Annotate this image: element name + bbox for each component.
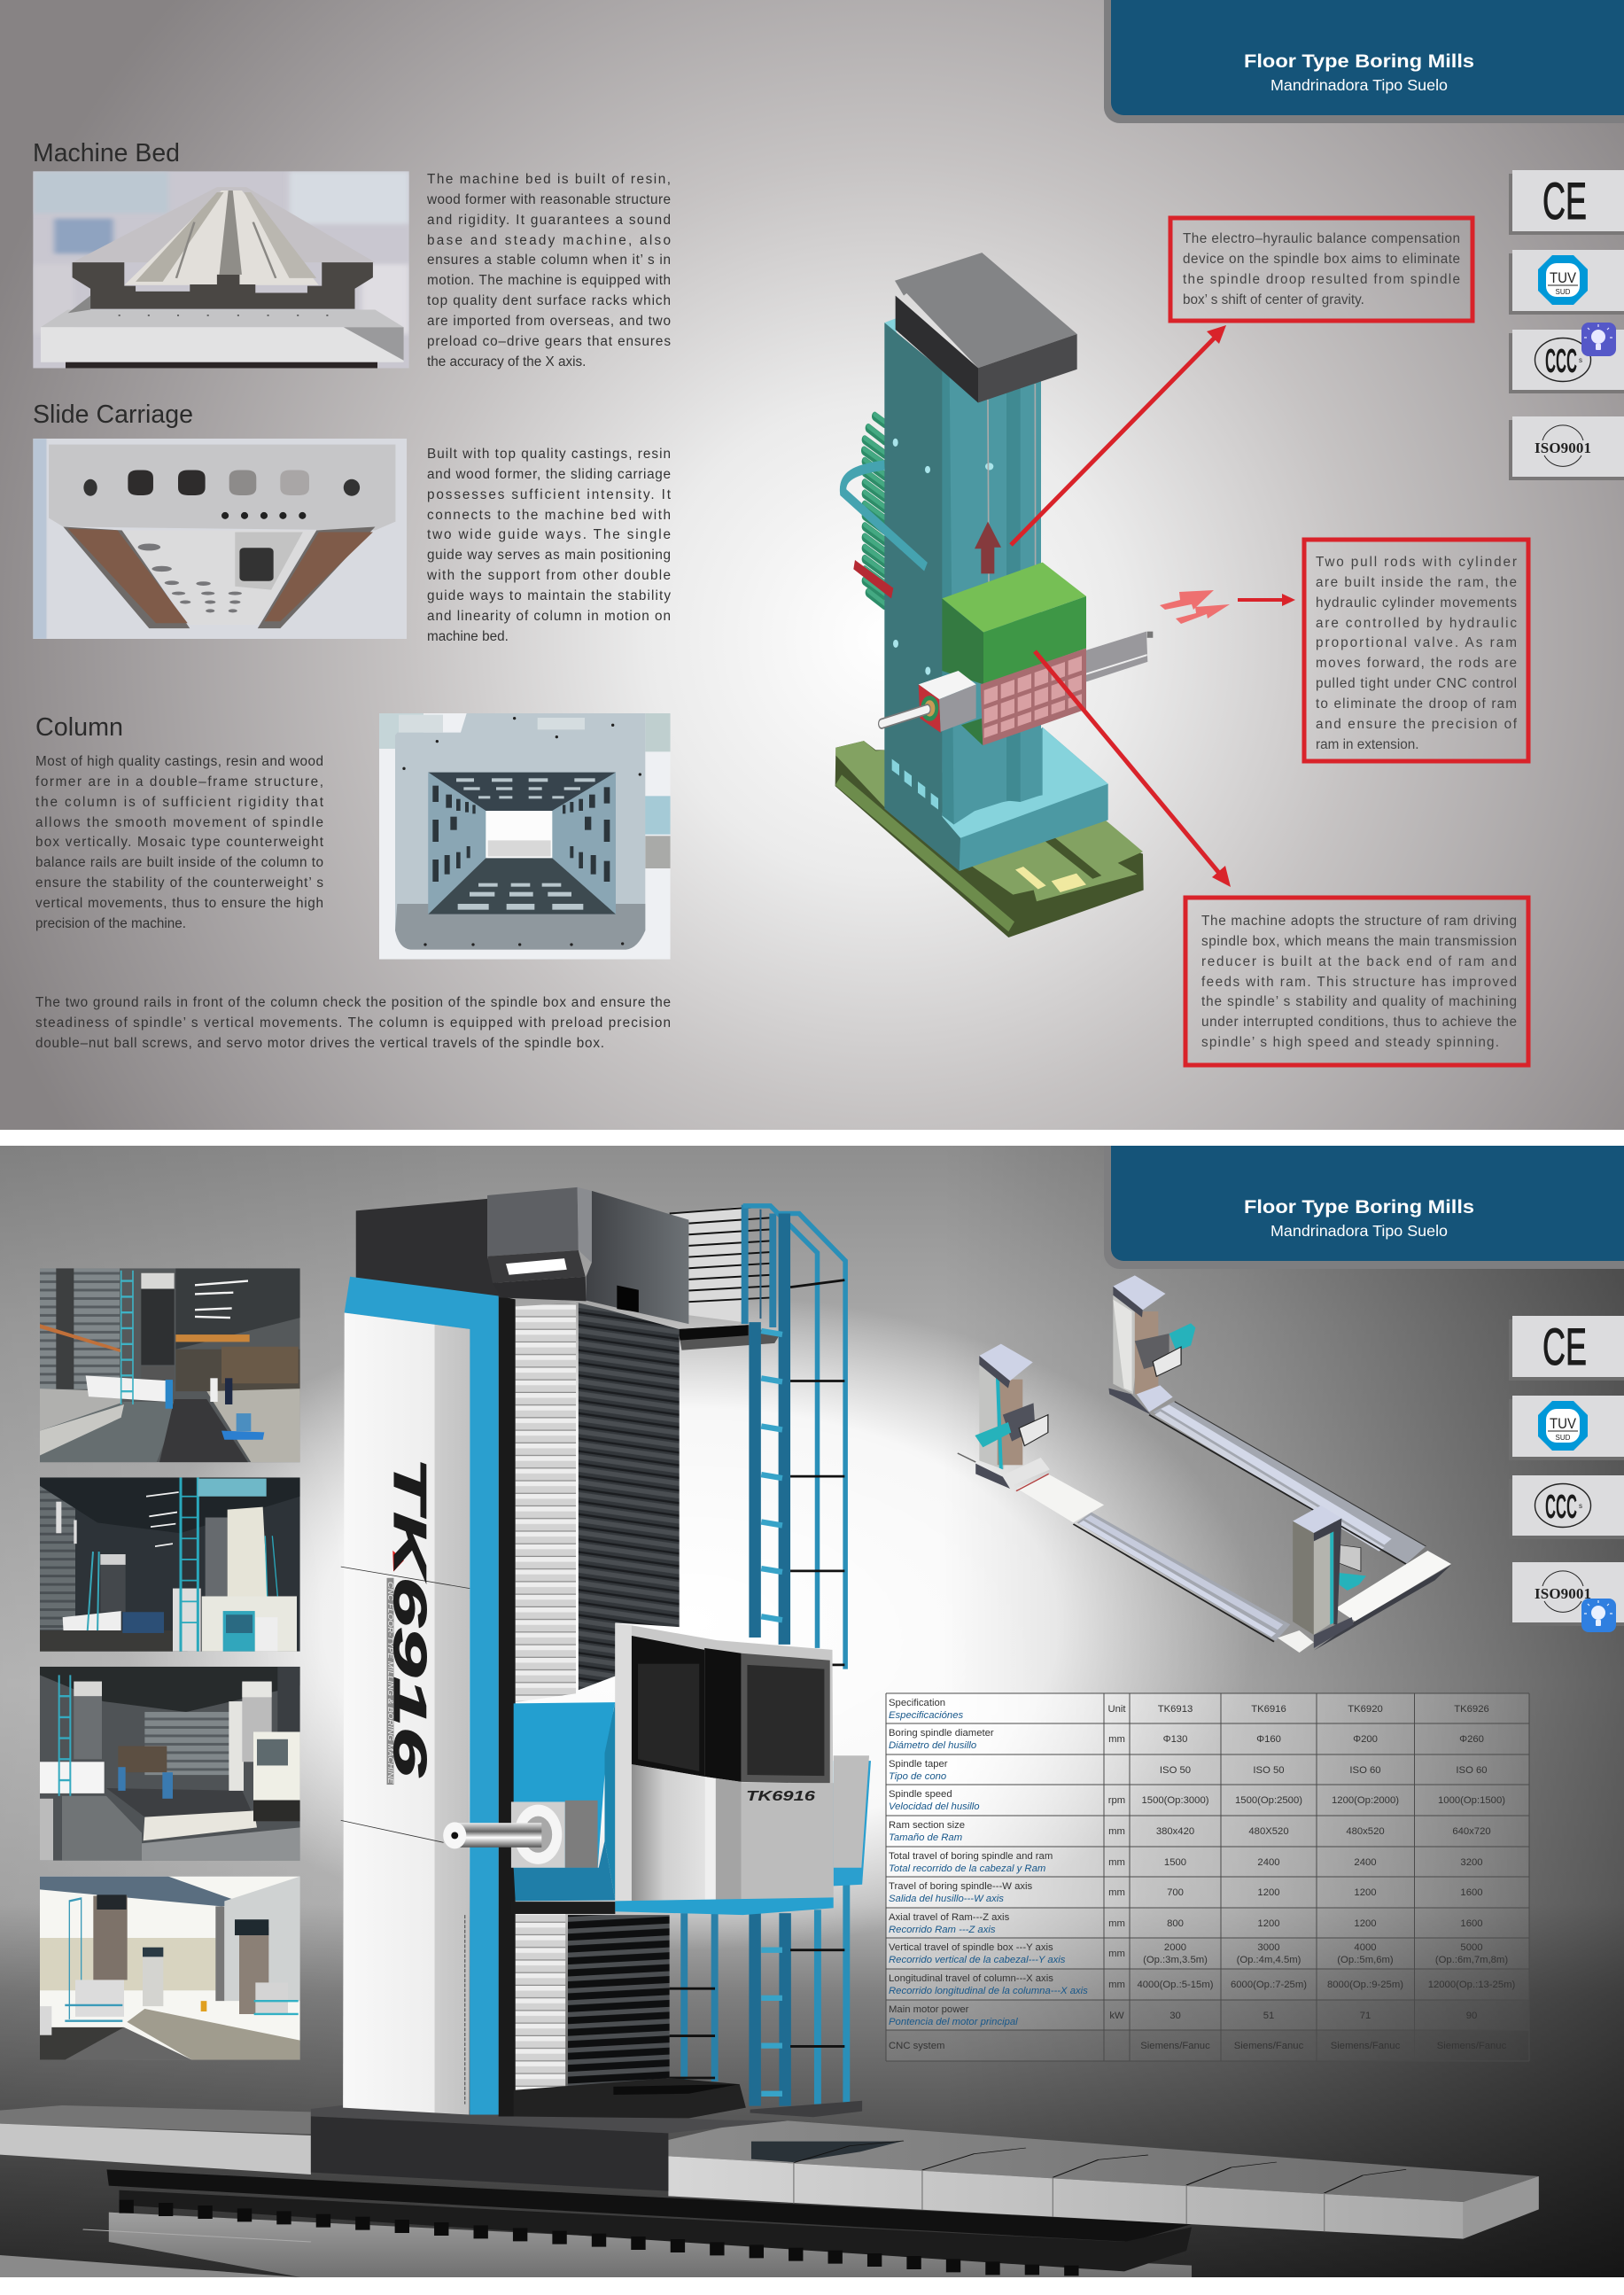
- text block: column description: precision of the machine.: [35, 916, 186, 931]
- icon: pink double arrows: [1160, 590, 1230, 624]
- row: spindle speed: 1200(Op:2000): [1332, 1795, 1399, 1806]
- arrow: red leader to transmission callout: [1035, 651, 1231, 887]
- row: W axis: Salida del husillo---W axis: [889, 1894, 1004, 1904]
- text block: slide carriage description: possesses sufficient intensity. It: [427, 487, 672, 502]
- badge: TUV top: [1509, 250, 1624, 315]
- badge: CE top: [1509, 170, 1624, 235]
- text block: machine bed description: the accuracy of the X axis.: [427, 354, 586, 370]
- reflection: [0, 2213, 1192, 2277]
- diagram: column cutaway model: [835, 253, 1153, 937]
- row: W axis: mm: [1108, 1887, 1125, 1898]
- row: motor power: 30: [1169, 2011, 1181, 2021]
- text block: slide carriage description: and wood former, the sliding carriage: [427, 467, 671, 482]
- row: Y axis: 5000: [1460, 1942, 1483, 1953]
- badge: CCC top: [1509, 330, 1624, 393]
- row: spindle taper: ISO 50: [1253, 1765, 1285, 1776]
- callout: pull rods: hydraulic cylinder movements: [1316, 595, 1517, 611]
- row: W axis: 700: [1167, 1887, 1184, 1898]
- column left: [958, 1344, 1048, 1489]
- white bellows: [516, 1303, 576, 2090]
- row: X axis: Recorrido longitudinal de la columna---X axis: [889, 1986, 1088, 1996]
- row: X axis: Longitudinal travel of column---X axis: [889, 1973, 1053, 1984]
- row: Z axis: Axial travel of Ram---Z axis: [889, 1912, 1010, 1923]
- badge: ISO9001 bottom: ISO9001: [1535, 1585, 1591, 1602]
- row: Y axis: Vertical travel of spindle box ---Y axis: [889, 1942, 1053, 1953]
- badge: CCC top: CCC: [1545, 343, 1577, 380]
- badge: TUV bottom: SUD: [1556, 1434, 1571, 1442]
- row: Y axis: 4000: [1354, 1942, 1377, 1953]
- row: Z axis: 800: [1167, 1918, 1184, 1929]
- row: header: Unit: [1107, 1704, 1126, 1715]
- row: X axis: 6000(Op.:7-25m): [1231, 1980, 1307, 1990]
- text block: machine bed description: and rigidity. It guarantees a sound: [427, 213, 671, 228]
- callout: ram driving structure: the spindle’ s stability and quality of machining: [1201, 994, 1517, 1009]
- row: ram section size: [886, 1816, 1529, 1847]
- row: W axis: 1200: [1354, 1887, 1377, 1898]
- row: spindle speed: 1500(Op:3000): [1141, 1795, 1209, 1806]
- row: CNC system: CNC system: [889, 2041, 944, 2051]
- machine base and way covers: [0, 2105, 1539, 2277]
- row: header: TK6926: [1454, 1704, 1489, 1715]
- spindle housing: [443, 1702, 615, 1901]
- table: specifications: [886, 1693, 1529, 2061]
- row: ram section size: Ram section size: [889, 1820, 965, 1831]
- callout: ram driving structure: spindle’ s high speed and steady spinning.: [1201, 1035, 1499, 1050]
- column body: [884, 318, 1041, 871]
- left way cover: [0, 2105, 311, 2174]
- photo: workshop 3: [40, 1667, 300, 1861]
- callout: balance compensation: box’ s shift of center of gravity.: [1183, 292, 1364, 307]
- text block: machine bed description: [426, 172, 671, 370]
- panel: top page background: [0, 0, 1624, 1130]
- row: Y axis: (Op.:3m,3.5m): [1143, 1955, 1208, 1965]
- header tab: top page: Floor Type Boring Mills: [1244, 51, 1474, 72]
- callout: ram driving structure: The machine adopts the structure of ram driving: [1201, 914, 1517, 929]
- text block: machine bed description: ensures a stable column when it’ s in: [427, 253, 671, 268]
- badge: ISO9001 top: ISO9001: [1535, 440, 1591, 456]
- row: ram section size: mm: [1108, 1826, 1125, 1837]
- row: total travel: Total travel of boring spindle and ram: [889, 1851, 1053, 1862]
- row: Y axis: (Op.:5m,6m): [1337, 1955, 1394, 1965]
- row: X axis: mm: [1108, 1980, 1125, 1990]
- row: boring spindle diameter: Φ160: [1256, 1734, 1281, 1745]
- header tab: bottom page: Floor Type Boring Mills: [1244, 1196, 1474, 1218]
- ladder and handrail: [670, 1205, 846, 2106]
- heading: Slide Carriage: Slide Carriage: [33, 401, 193, 429]
- text block: column description: box vertically. Mosaic type counterweight: [35, 835, 324, 850]
- row: motor power: Main motor power: [889, 2004, 969, 2015]
- callout: ram driving structure: reducer is built at the back end of ram and: [1201, 954, 1517, 969]
- row: boring spindle diameter: Φ260: [1459, 1734, 1484, 1745]
- badge: CCC bottom: s: [1579, 1502, 1582, 1510]
- row: spindle taper: [886, 1754, 1529, 1785]
- logo text: TK6916 on enclosure: TK6916: [746, 1789, 815, 1804]
- callout: pull rods: pulled tight under CNC control: [1316, 676, 1517, 691]
- text block: machine bed description: motion. The machine is equipped with: [427, 273, 671, 288]
- text block: column description: vertical movements, thus to ensure the high: [35, 896, 323, 911]
- row: Y axis: [886, 1938, 1529, 1969]
- row: boring spindle diameter: Φ130: [1163, 1734, 1187, 1745]
- row: motor power: kW: [1109, 2011, 1124, 2021]
- callout: pull rods: to eliminate the droop of ram: [1316, 696, 1517, 712]
- photo: workshop 4: [40, 1877, 300, 2060]
- row: X axis: 4000(Op.:5-15m): [1137, 1980, 1214, 1990]
- row: spindle speed: [886, 1785, 1529, 1816]
- row: header: Especificaciónes: [889, 1710, 963, 1721]
- row: X axis: [886, 1969, 1529, 2000]
- text block: column description: [35, 754, 324, 931]
- row: Z axis: Recorrido Ram ---Z axis: [889, 1925, 996, 1935]
- rails: [1073, 1402, 1426, 1642]
- callout: pull rods: and ensure the precision of: [1316, 717, 1518, 732]
- callout: balance compensation: device on the spindle box aims to eliminate: [1183, 252, 1460, 267]
- row: spindle taper: ISO 60: [1349, 1765, 1381, 1776]
- badge: ISO9001 top: [1509, 416, 1624, 480]
- top cap: [895, 253, 1077, 402]
- header tab: top page: Mandrinadora Tipo Suelo: [1270, 76, 1448, 94]
- illustration: TK6916 boring mill: [341, 1187, 871, 2118]
- text block: column description: ensure the stability of the counterweight’ s: [35, 875, 323, 891]
- callout: ram driving structure: under interrupted conditions, thus to achieve the: [1201, 1015, 1517, 1030]
- row: W axis: Travel of boring spindle---W axis: [889, 1881, 1033, 1892]
- callout: pull rods: Two pull rods with cylinder: [1316, 555, 1517, 570]
- badge: TUV top: SUD: [1556, 288, 1571, 296]
- callout: pull rods: moves forward, the rods are: [1316, 656, 1517, 671]
- row: motor power: 71: [1360, 2011, 1371, 2021]
- photo: workshop 2: [40, 1477, 300, 1652]
- badge: CE top: CE: [1542, 173, 1587, 230]
- ram tail: [1085, 632, 1153, 682]
- column back: [1108, 1275, 1195, 1415]
- row: total travel: 2400: [1354, 1857, 1377, 1868]
- operator enclosure: [615, 1623, 834, 1915]
- text block: guide rails note: The two ground rails in front of the column check the position of the spindle box and ensure the: [35, 995, 671, 1010]
- row: boring spindle diameter: [886, 1723, 1529, 1754]
- pink ribbed ram: [981, 649, 1086, 745]
- text block: slide carriage description: machine bed.: [427, 629, 509, 644]
- row: ram section size: Tamaño de Ram: [889, 1832, 962, 1843]
- row: ram section size: 480x520: [1346, 1826, 1385, 1837]
- row: Y axis: 2000: [1164, 1942, 1186, 1953]
- row: motor power: [886, 2000, 1529, 2030]
- row: spindle taper: ISO 60: [1456, 1765, 1488, 1776]
- heading: Column: Column: [35, 713, 123, 742]
- callout: pull rods: [1304, 540, 1528, 761]
- row: Y axis: mm: [1108, 1949, 1125, 1959]
- row: Z axis: mm: [1108, 1918, 1125, 1929]
- white column panel: [341, 1312, 470, 2115]
- text block: column description: the column is of sufficient rigidity that: [35, 795, 324, 810]
- row: spindle speed: Velocidad del husillo: [889, 1801, 980, 1812]
- photo: slide carriage: [33, 439, 407, 639]
- logo subtext on column: CNC FLOOR-TYPE MILLING & BORING MACHINE: [386, 1582, 394, 1785]
- row: total travel: Total recorrido de la cabezal y Ram: [889, 1863, 1045, 1874]
- ram head and spindle: [882, 671, 976, 733]
- text block: slide carriage description: and linearity of column in motion on: [427, 609, 671, 624]
- row: spindle taper: Tipo de cono: [889, 1771, 946, 1782]
- diagram: layout of three columns on rails: [958, 1275, 1451, 1653]
- row: motor power: 51: [1263, 2011, 1274, 2021]
- row: spindle speed: 1500(Op:2500): [1235, 1795, 1302, 1806]
- row: Y axis: 3000: [1257, 1942, 1280, 1953]
- row: X axis: 12000(Op.:13-25m): [1428, 1980, 1516, 1990]
- row: Z axis: 1600: [1460, 1918, 1483, 1929]
- badge: TUV bottom: TUV: [1550, 1415, 1577, 1432]
- row: spindle speed: Spindle speed: [889, 1789, 952, 1800]
- badge: TUV top: TUV: [1550, 269, 1577, 286]
- ramp cover: [1003, 1458, 1104, 1522]
- coil: [864, 415, 884, 605]
- text block: guide rails note: steadiness of spindle’ s vertical movements. The column is equipped with preload precision: [35, 1015, 671, 1031]
- text block: column description: Most of high quality castings, resin and wood: [35, 754, 323, 769]
- text block: slide carriage description: two wide guide ways. The single: [427, 527, 671, 542]
- row: motor power: 90: [1466, 2011, 1477, 2021]
- rods: [988, 384, 1036, 587]
- icon: light bulb badge bottom: [1581, 1599, 1616, 1632]
- badge: CE bottom: CE: [1542, 1319, 1587, 1376]
- callout: pull rods: are controlled by hydraulic: [1316, 616, 1517, 631]
- top head: [356, 1187, 688, 1324]
- row: motor power: Pontencia del motor principal: [889, 2017, 1018, 2027]
- text block: slide carriage description: with the support from other double: [426, 568, 671, 583]
- row: ram section size: 480X520: [1248, 1826, 1289, 1837]
- text block: machine bed description: preload co–drive gears that ensures: [427, 334, 671, 349]
- row: ram section size: 380x420: [1156, 1826, 1194, 1837]
- badge: TUV bottom: [1509, 1396, 1624, 1460]
- back wing: [834, 1755, 871, 1886]
- text block: machine bed description: top quality dent surface racks which: [427, 293, 671, 308]
- pedestal: [939, 727, 1108, 871]
- callout: pull rods: are built inside the ram, the: [1316, 575, 1517, 590]
- arrow: small red arrow to ram callout: [1238, 594, 1295, 606]
- text block: guide rails note: double–nut ball screws, and servo motor drives the vertical travels of the spindle box.: [35, 1036, 604, 1051]
- row: total travel: 3200: [1460, 1857, 1483, 1868]
- row: spindle taper: ISO 50: [1160, 1765, 1191, 1776]
- text block: slide carriage description: guide way serves as main positioning: [427, 548, 671, 563]
- row: spindle speed: rpm: [1108, 1795, 1125, 1806]
- badge: CCC bottom: CCC: [1545, 1489, 1577, 1526]
- row: Z axis: 1200: [1257, 1918, 1280, 1929]
- row: spindle taper: Spindle taper: [889, 1759, 948, 1770]
- callout: ram driving structure: spindle box, which means the main transmission: [1201, 934, 1517, 949]
- row: boring spindle diameter: Diámetro del husillo: [889, 1740, 976, 1751]
- callout: balance compensation: the spindle droop resulted from spindle: [1183, 272, 1460, 287]
- row: W axis: 1200: [1257, 1887, 1280, 1898]
- text block: machine bed description: are imported from overseas, and two: [427, 314, 671, 329]
- row: header: TK6913: [1158, 1704, 1193, 1715]
- row: header: TK6920: [1348, 1704, 1383, 1715]
- row: CNC system: Siemens/Fanuc: [1234, 2041, 1304, 2051]
- row: header: Specification: [889, 1698, 945, 1708]
- icon: dark red up arrow: [975, 522, 1001, 573]
- row: boring spindle diameter: Φ200: [1353, 1734, 1378, 1745]
- row: CNC system: Siemens/Fanuc: [1437, 2041, 1507, 2051]
- front cross rail: [1278, 1551, 1451, 1653]
- row: header: [886, 1693, 1529, 1723]
- row: CNC system: Siemens/Fanuc: [1331, 2041, 1401, 2051]
- text block: column description: balance rails are built inside of the column to: [35, 855, 323, 870]
- row: boring spindle diameter: mm: [1108, 1734, 1125, 1745]
- cable tray and clip: [843, 465, 926, 598]
- row: CNC system: Siemens/Fanuc: [1140, 2041, 1210, 2051]
- header tab: top page: [1104, 0, 1624, 123]
- text block: slide carriage description: Built with top quality castings, resin: [427, 447, 671, 462]
- text block: machine bed description: base and steady machine, also: [427, 233, 671, 248]
- arrow: red leader to balance callout: [1011, 325, 1226, 545]
- header tab: bottom page: Mandrinadora Tipo Suelo: [1270, 1222, 1448, 1240]
- panel: bottom page background: [0, 1146, 1624, 2277]
- text block: slide carriage description: guide ways to maintain the stability: [427, 588, 671, 603]
- top platform stripes: [670, 1206, 779, 1350]
- row: W axis: [886, 1877, 1529, 1908]
- heading: Machine Bed: Machine Bed: [33, 139, 180, 167]
- text block: slide carriage description: connects to the machine bed with: [427, 508, 671, 523]
- row: total travel: [886, 1847, 1529, 1877]
- row: total travel: 2400: [1257, 1857, 1280, 1868]
- row: total travel: mm: [1108, 1857, 1125, 1868]
- rails: [106, 2169, 1192, 2276]
- text block: column description: allows the smooth movement of spindle: [35, 815, 323, 830]
- text block: machine bed description: wood former with reasonable structure: [426, 192, 671, 207]
- row: Y axis: (Op.:6m,7m,8m): [1435, 1955, 1508, 1965]
- logo text: TK6916 on column: TK6916: [384, 1457, 435, 1778]
- dark bellows: [568, 1303, 680, 2090]
- row: boring spindle diameter: Boring spindle diameter: [889, 1728, 994, 1739]
- icon: light bulb badge top: [1581, 323, 1616, 356]
- row: spindle speed: 1000(Op:1500): [1438, 1795, 1505, 1806]
- text block: guide rails note: [35, 995, 671, 1051]
- row: W axis: 1600: [1460, 1887, 1483, 1898]
- row: CNC system: [886, 2030, 1529, 2061]
- header tab: bottom page: [1104, 1146, 1624, 1269]
- badge: CCC top: s: [1579, 356, 1582, 364]
- callout: ram driving structure: [1185, 898, 1528, 1065]
- row: Y axis: Recorrido vertical de la cabezal---Y axis: [889, 1955, 1066, 1965]
- bed: [835, 741, 1144, 937]
- photo: column casting: [379, 713, 671, 960]
- callout: ram driving structure: feeds with ram. This structure has improved: [1201, 975, 1517, 990]
- photo: machine bed: [33, 171, 409, 368]
- text block: column description: former are in a double–frame structure,: [35, 774, 323, 790]
- row: Z axis: [886, 1908, 1529, 1938]
- callout: pull rods: proportional valve. As ram: [1316, 635, 1517, 650]
- photo: workshop 1: [40, 1268, 300, 1462]
- row: X axis: 8000(Op.:9-25m): [1327, 1980, 1403, 1990]
- black column frame: [499, 1295, 862, 2118]
- blue column trim: [345, 1277, 499, 2115]
- saddle: [311, 2105, 788, 2191]
- badge: ISO9001 bottom: [1509, 1562, 1624, 1626]
- row: ram section size: 640x720: [1452, 1826, 1491, 1837]
- row: total travel: 1500: [1164, 1857, 1186, 1868]
- callout: pull rods: ram in extension.: [1316, 737, 1418, 752]
- callout: balance compensation: The electro–hyraulic balance compensation: [1183, 231, 1460, 246]
- column front: [1293, 1505, 1366, 1648]
- row: header: TK6916: [1251, 1704, 1286, 1715]
- text block: slide carriage description: [426, 447, 672, 644]
- callout: balance compensation: [1170, 218, 1472, 321]
- right way cover: [668, 2120, 1539, 2239]
- badge: CCC bottom: [1509, 1475, 1624, 1539]
- green spindle box: [942, 563, 1086, 745]
- row: Y axis: (Op.:4m,4.5m): [1237, 1955, 1302, 1965]
- text block: machine bed description: The machine bed is built of resin,: [427, 172, 671, 187]
- badge: CE bottom: [1509, 1316, 1624, 1381]
- row: Z axis: 1200: [1354, 1918, 1377, 1929]
